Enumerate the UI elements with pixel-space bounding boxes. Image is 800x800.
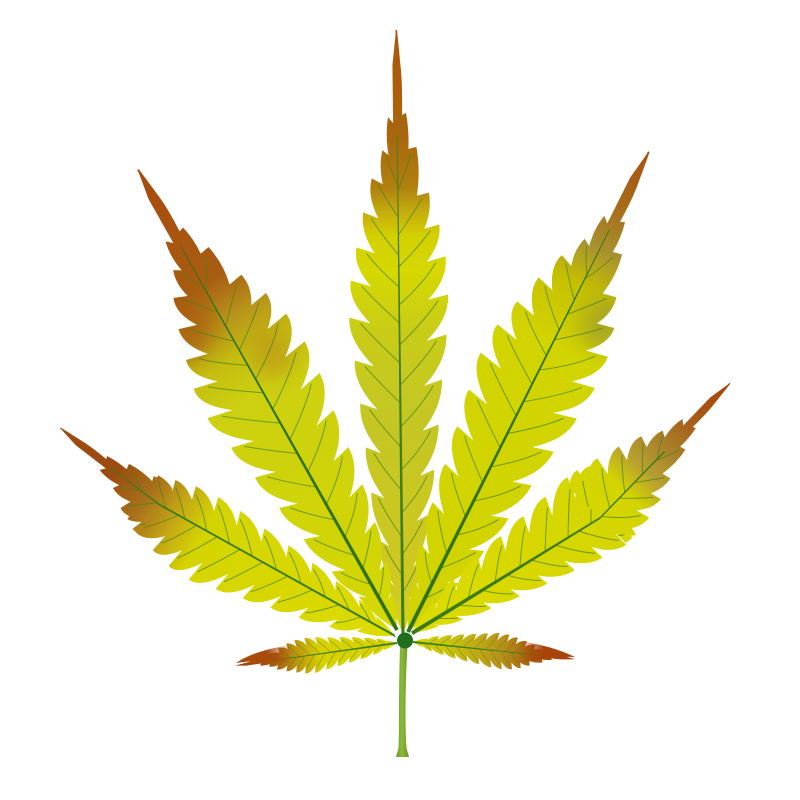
leaflet: upper left — [137, 169, 399, 631]
leaflet: lower left — [60, 428, 396, 638]
leaflet: lower right — [411, 382, 730, 635]
leaflet: bottom left — [234, 626, 400, 683]
stem node — [397, 632, 413, 648]
leaflet: centre — [346, 29, 452, 636]
leaflet: upper right — [406, 151, 650, 633]
stem — [396, 645, 409, 757]
leaflet: bottom right — [411, 624, 576, 677]
leaf — [60, 30, 730, 757]
